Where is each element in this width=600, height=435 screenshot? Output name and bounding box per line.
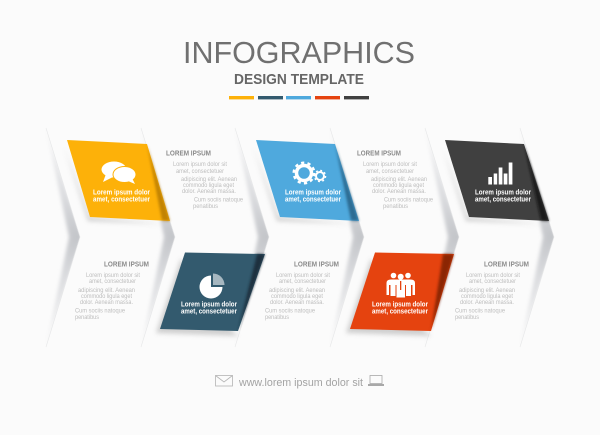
text block: step 3: penatibus — [383, 203, 408, 210]
icon: envelope — [216, 376, 232, 386]
chevron fold 6 — [520, 128, 556, 347]
text block: step 3: LOREM IPSUM — [357, 150, 401, 158]
icon: bar chart — [488, 162, 512, 184]
text block: step 1: amet, consectetuer — [176, 168, 224, 175]
text block: step 6: amet, consectetuer — [469, 278, 516, 285]
text block: step 1: Lorem ipsum dolor sit — [173, 161, 227, 168]
icon: laptop — [368, 376, 384, 386]
icon: pie chart — [200, 274, 224, 298]
card text — [93, 190, 150, 204]
card text — [181, 302, 237, 316]
text block: step 4: amet, consectetuer — [279, 278, 326, 285]
card text: amet, consectetuer — [372, 308, 428, 316]
text block: step 3: Cum sociis natoque — [384, 196, 434, 204]
icon: chat bubbles — [102, 162, 136, 184]
text block: step 1: LOREM IPSUM — [166, 150, 211, 158]
panel: blue card — [253, 140, 359, 224]
text block: step 1 — [166, 150, 244, 210]
chevron fold 2 — [141, 128, 177, 347]
text block: step 3: commodo ligula eget — [373, 182, 424, 189]
text block: step 3 — [357, 150, 434, 210]
panel: dark card — [442, 140, 549, 224]
text block: step 4: commodo ligula eget — [271, 293, 323, 300]
text block: step 4: Cum sociis natoque — [265, 308, 316, 314]
text block: step 6: dolor. Aenean massa. — [460, 299, 514, 306]
text block: step 4: Lorem ipsum dolor sit — [276, 272, 330, 279]
text block: step 3: amet, consectetuer — [366, 168, 414, 175]
text block: step 1: penatibus — [193, 203, 218, 210]
text block: step 2: Cum sociis natoque — [75, 308, 126, 314]
text block: step 2 — [75, 262, 149, 321]
text block: step 2: commodo ligula eget — [81, 293, 132, 300]
text block: step 4: adipiscing elit. Aenean — [269, 287, 326, 294]
card text: amet, consectetuer — [285, 196, 341, 204]
text block: step 3: Lorem ipsum dolor sit — [363, 161, 417, 168]
chevron fold 4 — [330, 128, 366, 347]
text block: step 4: LOREM IPSUM — [294, 262, 339, 268]
card text — [285, 190, 341, 204]
icon: people group — [386, 273, 415, 298]
card text — [475, 190, 531, 204]
card text: Lorem ipsum dolor — [372, 302, 428, 308]
text block: step 2: dolor. Aenean massa. — [80, 299, 133, 306]
text block: step 6: commodo ligula eget — [461, 293, 513, 300]
card text: Lorem ipsum dolor — [285, 190, 341, 196]
text block: step 4: penatibus — [265, 314, 289, 321]
text block: step 6: penatibus — [455, 314, 479, 321]
text block: step 1: adipiscing elit. Aenean — [181, 176, 238, 183]
text block: step 6: Cum sociis natoque — [455, 308, 506, 314]
text block: step 6: LOREM IPSUM — [484, 262, 529, 268]
card text — [372, 302, 428, 316]
card text: amet, consectetuer — [475, 196, 531, 204]
text block: step 1: Cum sociis natoque — [194, 196, 244, 204]
subtitle: DESIGN TEMPLATE — [234, 71, 364, 88]
text block: step 6 — [455, 262, 529, 321]
text block: step 2: amet, consectetuer — [89, 278, 136, 285]
text block: step 2: LOREM IPSUM — [104, 262, 149, 268]
card text: Lorem ipsum dolor — [181, 302, 237, 308]
card text: amet, consectetuer — [181, 308, 237, 316]
text block: step 4 — [265, 262, 339, 321]
footer text: www.lorem ipsum dolor sit — [238, 377, 363, 389]
text block: step 2: adipiscing elit. Aenean — [78, 287, 136, 294]
text block: step 1: commodo ligula eget — [183, 182, 234, 189]
card text: amet, consectetuer — [93, 196, 150, 204]
panel: orange card — [346, 252, 454, 336]
text block: step 3: adipiscing elit. Aenean — [371, 176, 428, 183]
text block: step 4: dolor. Aenean massa. — [270, 299, 324, 306]
colour key bars — [229, 96, 369, 99]
text block: step 2: Lorem ipsum dolor sit — [86, 272, 140, 279]
text block: step 1: dolor. Aenean massa. — [182, 188, 236, 195]
card text: Lorem ipsum dolor — [475, 190, 531, 196]
card text: Lorem ipsum dolor — [93, 190, 150, 196]
icon: gears — [294, 163, 326, 183]
chevron fold 5 — [425, 128, 461, 347]
text block: step 2: penatibus — [75, 314, 99, 321]
chevron fold 3 — [235, 128, 271, 347]
title: INFOGRAPHICS — [183, 35, 415, 70]
panel: teal card — [156, 252, 265, 336]
text block: step 3: dolor. Aenean massa. — [372, 188, 426, 195]
text block: step 6: Lorem ipsum dolor sit — [466, 272, 520, 279]
text block: step 6: adipiscing elit. Aenean — [459, 287, 516, 294]
chevron fold 1 — [46, 128, 82, 347]
panel: yellow card — [64, 140, 170, 224]
